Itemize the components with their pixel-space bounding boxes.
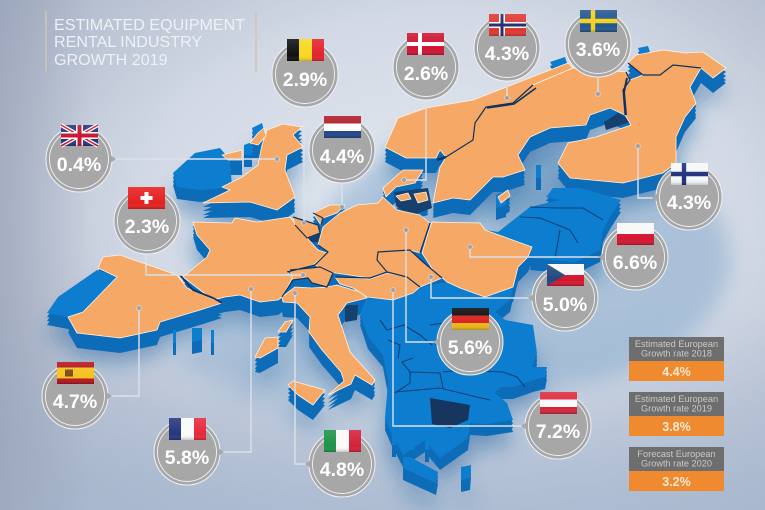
bubble: Austria 7.2%: 7.2%: [536, 421, 580, 443]
leader lines and dots: [108, 78, 655, 464]
bubble: UK 0.4%: 0.4%: [57, 154, 101, 176]
bubble: Italy 4.8%: [305, 430, 375, 497]
non-surveyed countries: [47, 46, 650, 483]
bubble: Switzerland 2.3%: 2.3%: [125, 216, 169, 238]
title rules: [46, 11, 256, 72]
icon: Italy flag: [324, 430, 361, 452]
bubble: Finland 4.3%: [652, 163, 722, 230]
panel: estimated growth 2019: [629, 392, 724, 436]
title text: GROWTH 2019: [54, 51, 168, 69]
icon: Denmark flag: [407, 33, 444, 55]
bubble: Czech Republic 5.0%: 5.0%: [543, 294, 587, 316]
bubble: Poland 6.6%: [598, 223, 668, 290]
bubble: Austria 7.2%: [521, 392, 591, 459]
panel: estimated growth 2019: Growth rate 2019: [641, 404, 712, 414]
bubble: UK 0.4%: [46, 125, 116, 192]
panel: estimated growth 2018: Growth rate 2018: [641, 348, 712, 358]
bubble: Germany 5.6%: [433, 308, 503, 375]
bubble: Spain 4.7%: 4.7%: [53, 391, 97, 413]
panel: forecast growth 2020: Growth rate 2020: [641, 458, 712, 468]
panel: forecast growth 2020: Forecast European: [637, 449, 716, 459]
Aegean sea shadow: [430, 398, 470, 428]
bubble: Denmark 2.6%: 2.6%: [404, 63, 448, 85]
bubble: Netherlands 4.4%: [309, 116, 375, 183]
map shadow: [47, 70, 726, 507]
bubble: France 5.8%: [154, 418, 224, 485]
Balkan and Baltic borders: [380, 207, 603, 400]
bubble: Finland 4.3%: 4.3%: [667, 192, 711, 214]
icon: Czech flag: [547, 264, 584, 286]
bubble: Spain 4.7%: [42, 362, 112, 429]
icon: Finland flag: [671, 163, 708, 185]
icon: Belgium flag: [287, 39, 324, 61]
panel: estimated growth 2019: Estimated European: [635, 394, 718, 404]
icon: Sweden flag: [580, 10, 617, 32]
bubble: Belgium 2.9%: 2.9%: [283, 69, 327, 91]
bubble: Norway 4.3%: 4.3%: [485, 43, 529, 65]
bubble: Denmark 2.6%: [393, 33, 459, 100]
surveyed countries: [68, 50, 726, 405]
icon: Germany flag: [452, 308, 489, 330]
panel: forecast growth 2020: [629, 447, 724, 491]
title text: RENTAL INDUSTRY: [54, 33, 202, 51]
bubble: Belgium 2.9%: [272, 39, 338, 107]
map extrusion sides: [47, 50, 726, 495]
icon: Norway flag: [489, 14, 526, 36]
panel: forecast growth 2020: 3.2%: [662, 475, 691, 489]
bubble: Switzerland 2.3%: [114, 187, 180, 254]
bubble: Sweden 3.6%: [565, 10, 631, 77]
icon: Spain flag: [57, 362, 94, 384]
panel: estimated growth 2018: [629, 337, 724, 381]
anchor dots: [137, 92, 640, 310]
bubble: France 5.8%: 5.8%: [165, 447, 209, 469]
panel: estimated growth 2018: 4.4%: [662, 365, 691, 379]
bubble: Germany 5.6%: 5.6%: [448, 337, 492, 359]
title text: ESTIMATED EQUIPMENT: [54, 16, 245, 34]
flag shading: [57, 10, 708, 452]
panel: estimated growth 2019: 3.8%: [662, 420, 691, 434]
bubble: Netherlands 4.4%: 4.4%: [320, 146, 364, 168]
icon: Poland flag: [617, 223, 654, 245]
icon: France flag: [169, 418, 206, 440]
bubble: Poland 6.6%: 6.6%: [613, 252, 657, 274]
title: [46, 11, 256, 72]
bubble: Norway 4.3%: [474, 14, 540, 81]
icon: Austria flag: [540, 392, 577, 414]
bubble: Sweden 3.6%: 3.6%: [576, 39, 620, 61]
icon: UK flag: [61, 125, 98, 146]
national borders: [180, 63, 701, 303]
icon: Switzerland flag: [128, 187, 165, 209]
panel: estimated growth 2018: Estimated European: [635, 339, 718, 349]
bubble: Italy 4.8%: 4.8%: [320, 459, 364, 481]
bubble: Czech Republic 5.0%: [528, 264, 598, 331]
icon: Netherlands flag: [324, 116, 361, 138]
dark straits: [304, 113, 630, 322]
